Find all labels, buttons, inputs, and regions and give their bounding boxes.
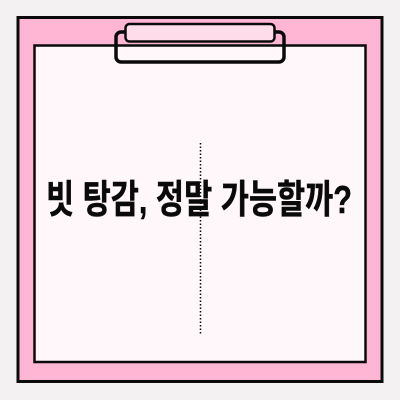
icon: clipboard clip [116,24,284,62]
dotted vertical divider [200,143,202,335]
panel: white paper sheet [34,46,366,362]
